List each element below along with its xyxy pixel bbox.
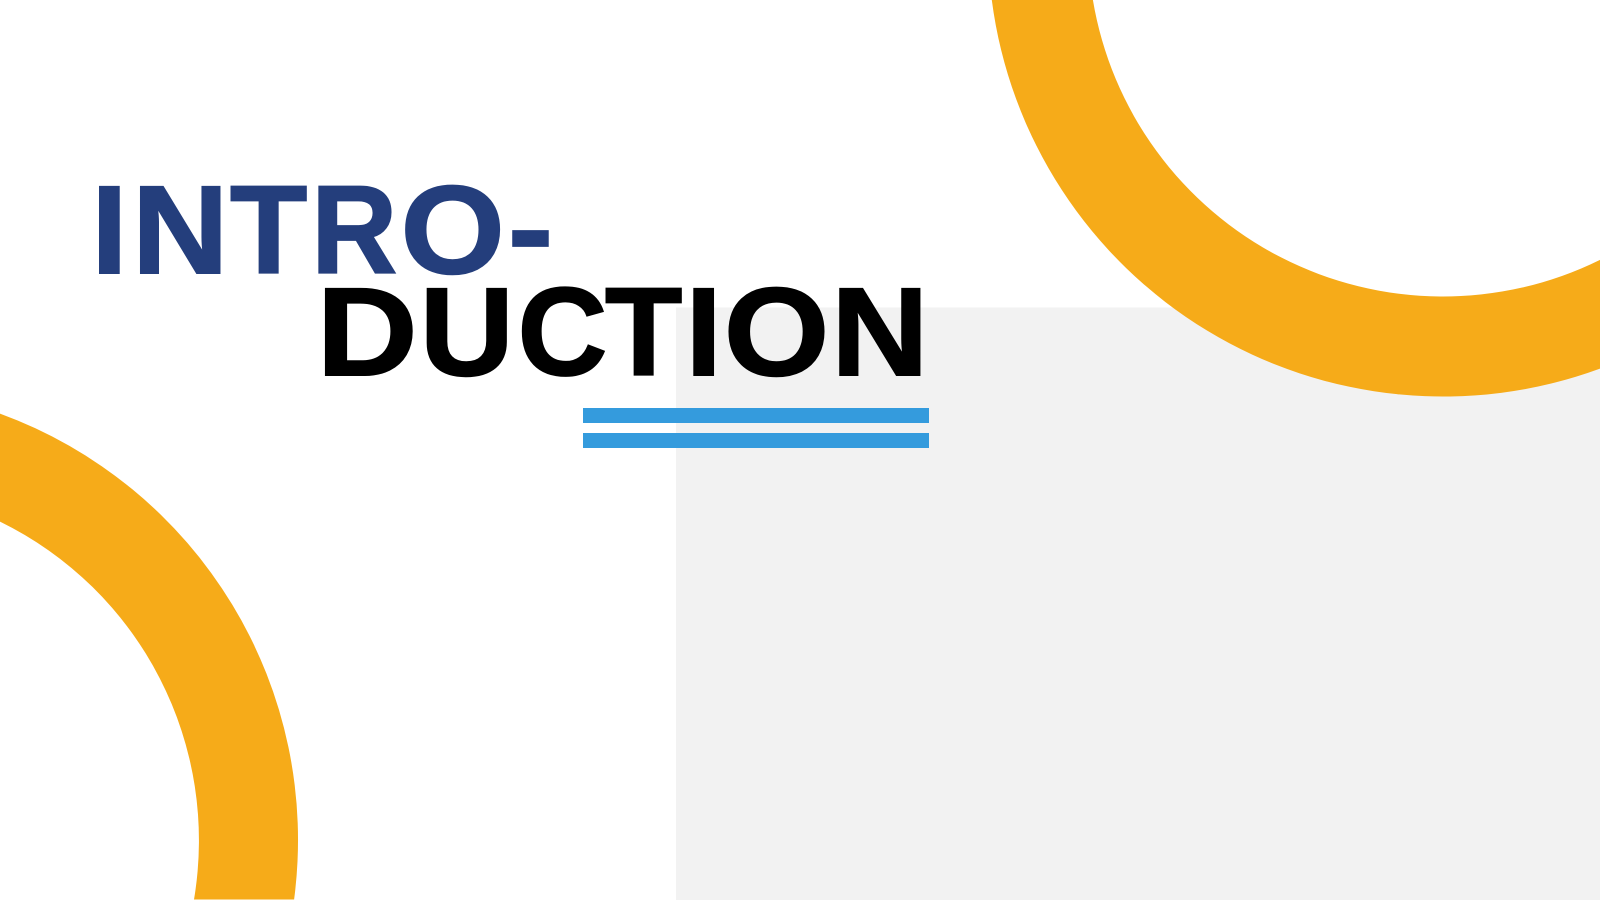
underline: double blue bars bbox=[583, 408, 929, 448]
title line two: DUCTION: C bbox=[518, 263, 607, 402]
title line two: DUCTION: I bbox=[686, 262, 722, 403]
title line one: INTRO-: I bbox=[91, 160, 128, 301]
title line two: DUCTION bbox=[317, 261, 929, 403]
title line one: INTRO-: R bbox=[311, 159, 397, 300]
title line one: INTRO-: N bbox=[132, 161, 229, 300]
ring: bottom left orange arc bbox=[0, 414, 298, 900]
title line two: DUCTION: N bbox=[831, 261, 929, 402]
title line two: DUCTION: O bbox=[724, 262, 829, 402]
title line one: INTRO-: O bbox=[401, 160, 505, 300]
title: INTRO-DUCTION bbox=[91, 158, 929, 403]
title line one: INTRO-: - bbox=[508, 158, 553, 298]
ring: top right orange arc bbox=[992, 0, 1600, 397]
title line one: INTRO- bbox=[91, 158, 553, 301]
title line two: DUCTION: T bbox=[605, 262, 682, 402]
title line one: INTRO-: T bbox=[230, 160, 307, 300]
panel: grey background block bbox=[676, 308, 1600, 900]
title line two: DUCTION: D bbox=[317, 263, 418, 402]
title line two: DUCTION: U bbox=[420, 262, 514, 403]
